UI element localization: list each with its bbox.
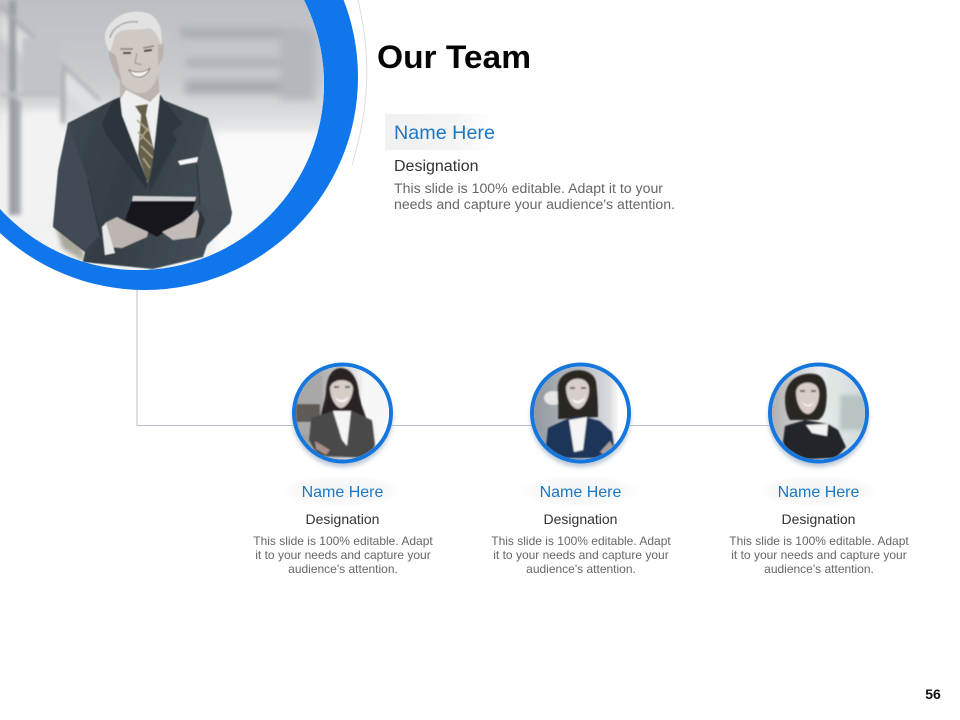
tie — [135, 104, 155, 183]
blue ring — [530, 362, 631, 464]
name: Name Here — [540, 484, 622, 501]
lead member text block — [385, 114, 675, 212]
head — [110, 28, 162, 93]
nose — [135, 53, 142, 65]
name: Name Here — [302, 484, 384, 501]
shirt — [120, 90, 163, 183]
team member 3 — [766, 360, 870, 467]
name: Name Here — [778, 484, 860, 501]
team member 2 — [528, 360, 632, 467]
name background — [280, 475, 404, 507]
neck — [119, 76, 160, 102]
description: This slide is 100% editable. Adapt — [491, 534, 671, 548]
hands — [105, 217, 148, 248]
description: This slide is 100% editable. Adapt it to your — [394, 181, 664, 196]
description: This slide is 100% editable. Adapt — [729, 534, 909, 548]
brows and eyes — [120, 46, 154, 49]
left lapel — [102, 97, 147, 190]
description: needs and capture your audience's attention. — [394, 197, 675, 212]
name background — [756, 475, 880, 507]
photo: woman in dark top — [772, 366, 865, 460]
right lapel — [149, 94, 182, 193]
name background — [385, 114, 497, 150]
blue ring — [768, 362, 869, 464]
photo: woman in grey suit — [296, 366, 389, 460]
ring shadow — [768, 367, 868, 467]
name: Name Here — [394, 122, 495, 144]
description: audience's attention. — [764, 562, 874, 576]
photo: man in suit — [0, 0, 330, 280]
team member 1 — [290, 360, 394, 467]
tablet — [125, 197, 196, 237]
title: Our Team — [377, 39, 531, 75]
team member 1 text — [253, 475, 433, 576]
ring shadow — [292, 367, 392, 467]
jacket — [53, 100, 232, 269]
photo: woman in navy blazer — [534, 366, 627, 460]
designation: Designation — [544, 511, 617, 527]
panel: lead portrait — [0, 0, 358, 290]
ring shadow — [530, 367, 630, 467]
blue ring — [0, 0, 358, 290]
description: audience's attention. — [288, 562, 398, 576]
team member 3 text — [729, 475, 909, 576]
description: it to your needs and capture your — [731, 548, 907, 562]
team member 2 text — [491, 475, 671, 576]
description: audience's attention. — [526, 562, 636, 576]
designation: Designation — [782, 511, 855, 527]
smile — [129, 68, 150, 77]
description: it to your needs and capture your — [493, 548, 669, 562]
pocket square — [178, 157, 198, 165]
connector line: org chart — [137, 288, 772, 426]
designation: Designation — [394, 158, 478, 175]
blue ring — [292, 362, 393, 464]
designation: Designation — [306, 511, 379, 527]
hair — [105, 12, 162, 52]
description: it to your needs and capture your — [255, 548, 431, 562]
name background — [518, 475, 642, 507]
page number: 56 — [925, 686, 941, 702]
description: This slide is 100% editable. Adapt — [253, 534, 433, 548]
thin decorative arc — [352, 0, 367, 165]
